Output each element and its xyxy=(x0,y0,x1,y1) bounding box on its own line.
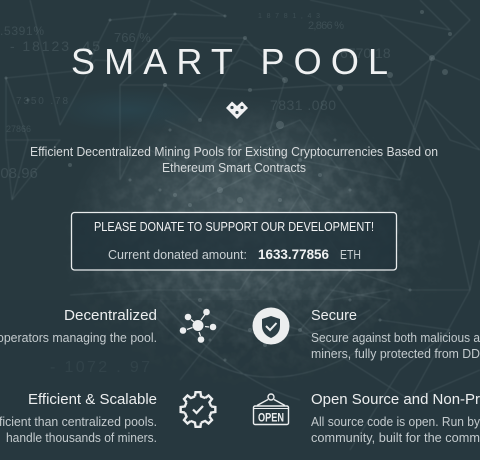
description xyxy=(311,415,480,445)
description: community, built for the comm xyxy=(311,431,480,445)
background numbers: 7350 .78 xyxy=(16,96,68,107)
icon: open sign xyxy=(253,394,289,424)
background numbers: - 18123 .45 xyxy=(10,38,100,54)
heading: Open Source and Non-Pr xyxy=(311,392,480,408)
icon: shield xyxy=(252,308,290,344)
description: handle thousands of miners. xyxy=(6,431,157,445)
currency: ETH xyxy=(340,248,361,262)
background numbers: 18781,43 xyxy=(258,13,320,20)
background dots xyxy=(4,10,452,362)
heading: Secure xyxy=(311,308,357,324)
background numbers xyxy=(0,13,391,376)
icon: network xyxy=(180,309,216,343)
description: miners, fully protected from DD xyxy=(311,347,480,361)
description: ficient than centralized pools. xyxy=(0,415,157,429)
icon: logo xyxy=(226,102,248,119)
background numbers: 7831 .080 xyxy=(270,97,336,113)
background numbers: 6770 18 xyxy=(340,45,391,61)
background numbers: .5391% xyxy=(0,24,44,38)
icon: open sign: OPEN xyxy=(258,410,284,424)
background numbers: 27866 xyxy=(6,124,31,134)
heading: Efficient & Scalable xyxy=(28,392,157,408)
background numbers: 766 % xyxy=(114,30,151,45)
heading: Decentralized xyxy=(64,308,157,324)
donation box xyxy=(72,212,396,270)
donated amount value: 1633.77856 xyxy=(258,247,329,262)
subtitle xyxy=(30,145,438,175)
title: SMART POOL xyxy=(71,41,388,82)
background numbers: - 1072 . 97 xyxy=(50,359,150,376)
feature: secure xyxy=(252,308,480,361)
feature: efficient and scalable xyxy=(0,392,215,445)
description: operators managing the pool. xyxy=(0,331,157,345)
subtitle: Efficient Decentralized Mining Pools for Existing Cryptocurrencies Based on xyxy=(30,145,438,159)
icon: gear with check xyxy=(181,392,215,427)
description xyxy=(311,331,480,361)
subtitle: Ethereum Smart Contracts xyxy=(162,161,306,175)
feature: open source xyxy=(253,392,480,445)
description xyxy=(0,415,157,445)
background numbers: 2,866 % xyxy=(308,20,344,32)
donated amount label: Current donated amount: xyxy=(108,248,247,262)
donation heading: PLEASE DONATE TO SUPPORT OUR DEVELOPMENT! xyxy=(94,220,374,234)
feature: decentralized xyxy=(0,308,216,345)
